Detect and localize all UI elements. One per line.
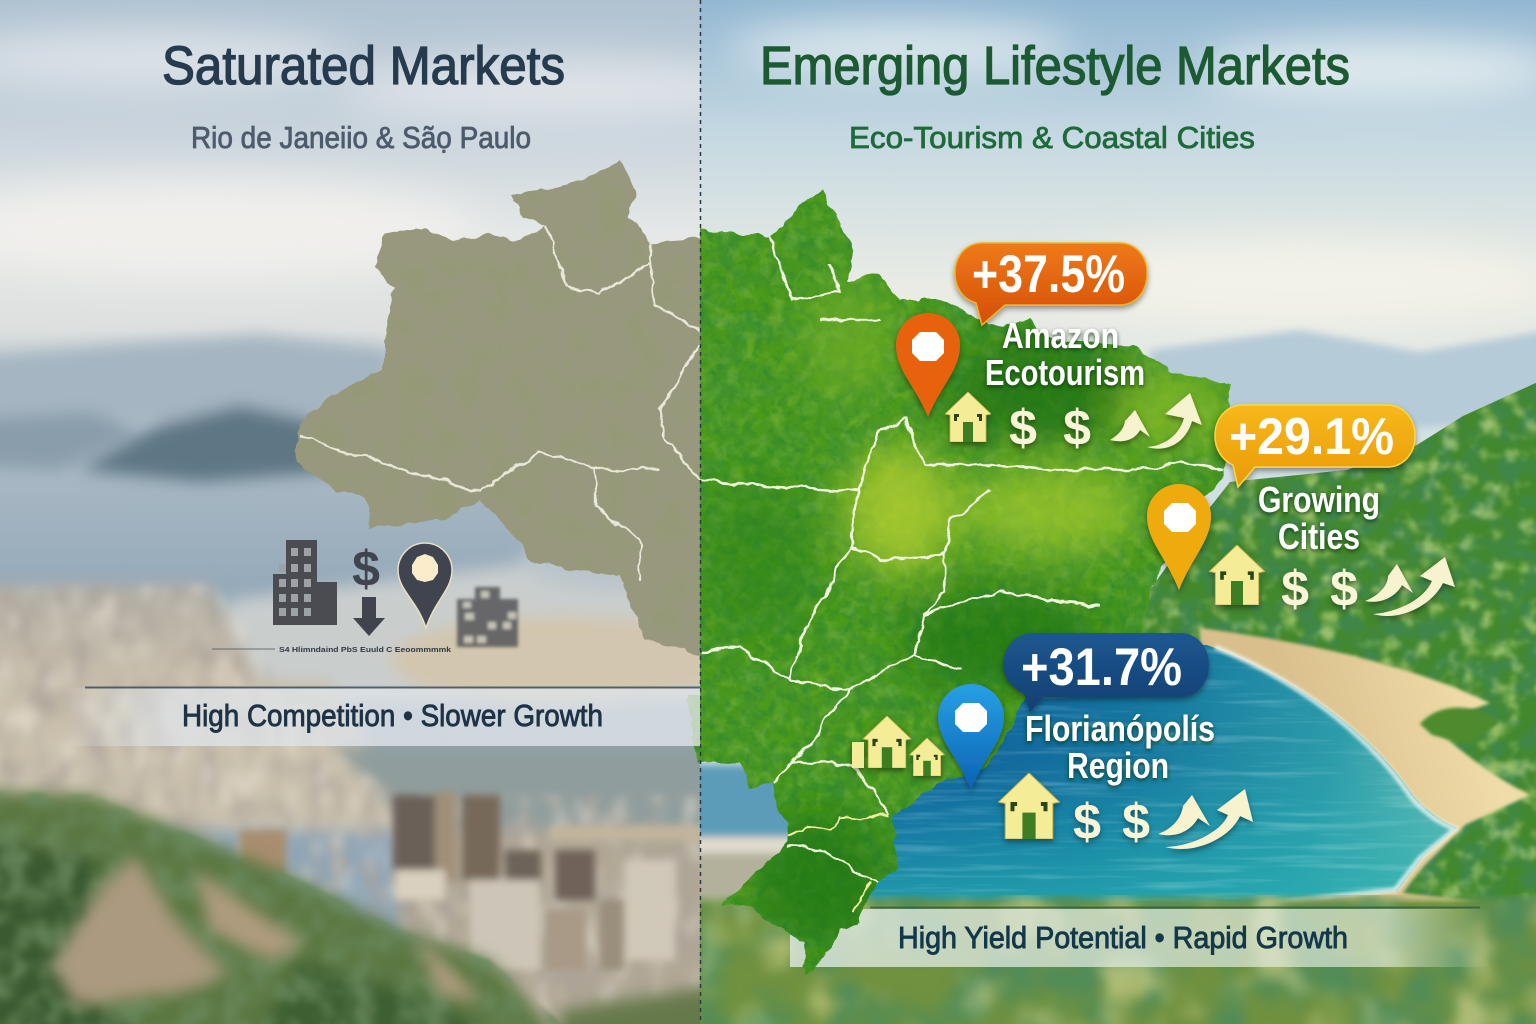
icons: house, dollars, arrows: $ — [1073, 794, 1101, 850]
heading: emerging markets: Emerging Lifestyle Markets — [760, 36, 1350, 96]
map: Brazil west, faded — [294, 160, 700, 656]
map region borders, faded side — [300, 225, 700, 580]
icon: dollar with down arrow — [352, 541, 385, 636]
heading: saturated markets: Saturated Markets — [162, 36, 565, 96]
water ripples — [872, 648, 1432, 901]
callout: Florianópolis Region — [852, 633, 1253, 850]
icons: house, dollars, arrows: $ — [1281, 561, 1309, 617]
icons: house, dollars, arrows: $ — [1009, 400, 1037, 456]
label: Florianópolis Region — [1025, 708, 1215, 786]
left forest texture — [0, 790, 562, 1024]
badge: +31.7% — [1003, 633, 1209, 712]
icons: house, dollars, arrows — [1209, 545, 1455, 617]
forest hillside — [1130, 382, 1536, 906]
left background: hazy Rio cityscape — [0, 0, 700, 1024]
label: Growing Cities — [1258, 479, 1380, 557]
beach — [1200, 628, 1530, 908]
label: Florianópolis Region: Region — [1067, 745, 1169, 786]
icon: dark location pin — [398, 543, 452, 628]
surf — [1215, 647, 1455, 904]
icons: house, dollars, arrows: $ — [1122, 794, 1150, 850]
badge: +37.5%: +37.5% — [972, 245, 1125, 304]
label: Growing Cities: Cities — [1278, 516, 1360, 557]
subheading: saturated markets: Rio de Janeiio & Sãọ Paulo — [191, 120, 531, 155]
label: Florianópolis Region: Florianópolís — [1025, 708, 1215, 749]
icon: blurred building — [457, 587, 518, 647]
label: Amazon Ecotourism: Ecotourism — [985, 352, 1145, 393]
bottom foliage — [690, 900, 1536, 1024]
label: Growing Cities: Growing — [1258, 479, 1380, 520]
western water and cloud band — [700, 761, 788, 903]
footer strip background: emerging markets — [790, 909, 1490, 967]
badge: +31.7%: +31.7% — [1021, 638, 1182, 697]
badge: +29.1%: +29.1% — [1229, 408, 1394, 466]
label: Amazon Ecotourism: Amazon — [1002, 315, 1119, 356]
towers and bridge — [240, 792, 710, 970]
icons: house, dollars, arrows: $ — [1063, 400, 1091, 456]
label: Amazon Ecotourism — [985, 315, 1145, 393]
footer strip: saturated markets: High Competition • Slower Growth — [182, 698, 603, 733]
icon: dollar with down arrow: $ — [352, 541, 380, 597]
footer strip: saturated markets — [60, 688, 700, 746]
caption: illegible small print: S4 Hlimndaind PbS Euuld C Eeoommmmk — [279, 645, 452, 654]
subheading: emerging markets: Eco-Tourism & Coastal Cities — [849, 120, 1255, 155]
map region borders, vivid side — [700, 235, 1225, 883]
footer label: emerging markets: High Yield Potential • Rapid Growth — [898, 920, 1348, 955]
tree clump on beach — [1420, 708, 1500, 745]
city texture — [0, 575, 710, 1024]
left background: haze and clouds behind icons — [0, 530, 730, 1024]
icon: tall building — [273, 540, 337, 625]
badge: +37.5% — [955, 243, 1147, 325]
icon: orange pin — [896, 313, 960, 417]
central dashed divider — [700, 0, 702, 1024]
icon group: saturated market symbols — [212, 540, 518, 654]
icons: house, dollars, arrows: $ — [1330, 561, 1358, 617]
right background: coastal forest and bay — [690, 0, 1536, 1024]
rock faces — [52, 855, 485, 1005]
icon: blue pin — [938, 684, 1004, 790]
map: Brazil east, vivid green — [670, 180, 1250, 980]
badge: +29.1% — [1215, 405, 1415, 487]
callout: Amazon Ecotourism — [896, 243, 1202, 456]
callout: Growing Cities — [1147, 405, 1455, 617]
icons: houses on southern map — [852, 716, 944, 776]
bay water — [866, 644, 1457, 904]
icon: yellow pin — [1147, 484, 1211, 590]
icons: house, dollars, arrows — [999, 773, 1253, 850]
icons: house, dollars, arrows — [945, 392, 1202, 456]
